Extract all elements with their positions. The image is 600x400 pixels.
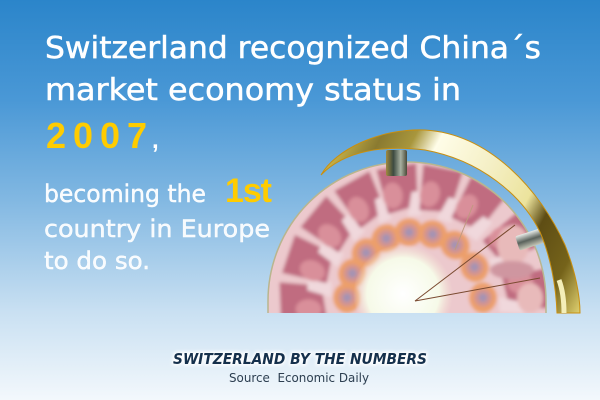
banknote fan disc bbox=[268, 162, 546, 313]
headline: Switzerland recognized China´s bbox=[45, 31, 541, 66]
highlighted year: 2007 bbox=[46, 115, 147, 156]
pale upright portraits on the right bbox=[497, 225, 529, 265]
highlighted rank: 1st bbox=[225, 172, 272, 210]
statement text: to do so. bbox=[44, 247, 150, 275]
source line: Source Economic Daily bbox=[229, 371, 369, 385]
statement text: country in Europe bbox=[44, 215, 270, 243]
statement text bbox=[44, 180, 270, 275]
side peg bbox=[515, 228, 545, 251]
footer title: SWITZERLAND BY THE NUMBERS bbox=[173, 350, 427, 368]
headline: market economy status in bbox=[45, 73, 461, 108]
illustration: banknote fan in gold globe frame bbox=[267, 129, 580, 314]
arc highlight bbox=[559, 280, 564, 313]
footer title: SWITZERLAND BY THE NUMBERS bbox=[173, 350, 427, 368]
top peg bbox=[386, 150, 407, 176]
headline bbox=[45, 31, 541, 108]
statement text: becoming the bbox=[44, 180, 206, 208]
disc rim bbox=[268, 162, 546, 313]
highlighted year: , bbox=[152, 127, 159, 154]
pale fan centre bbox=[354, 246, 450, 313]
gold meridian arc bbox=[321, 130, 580, 313]
